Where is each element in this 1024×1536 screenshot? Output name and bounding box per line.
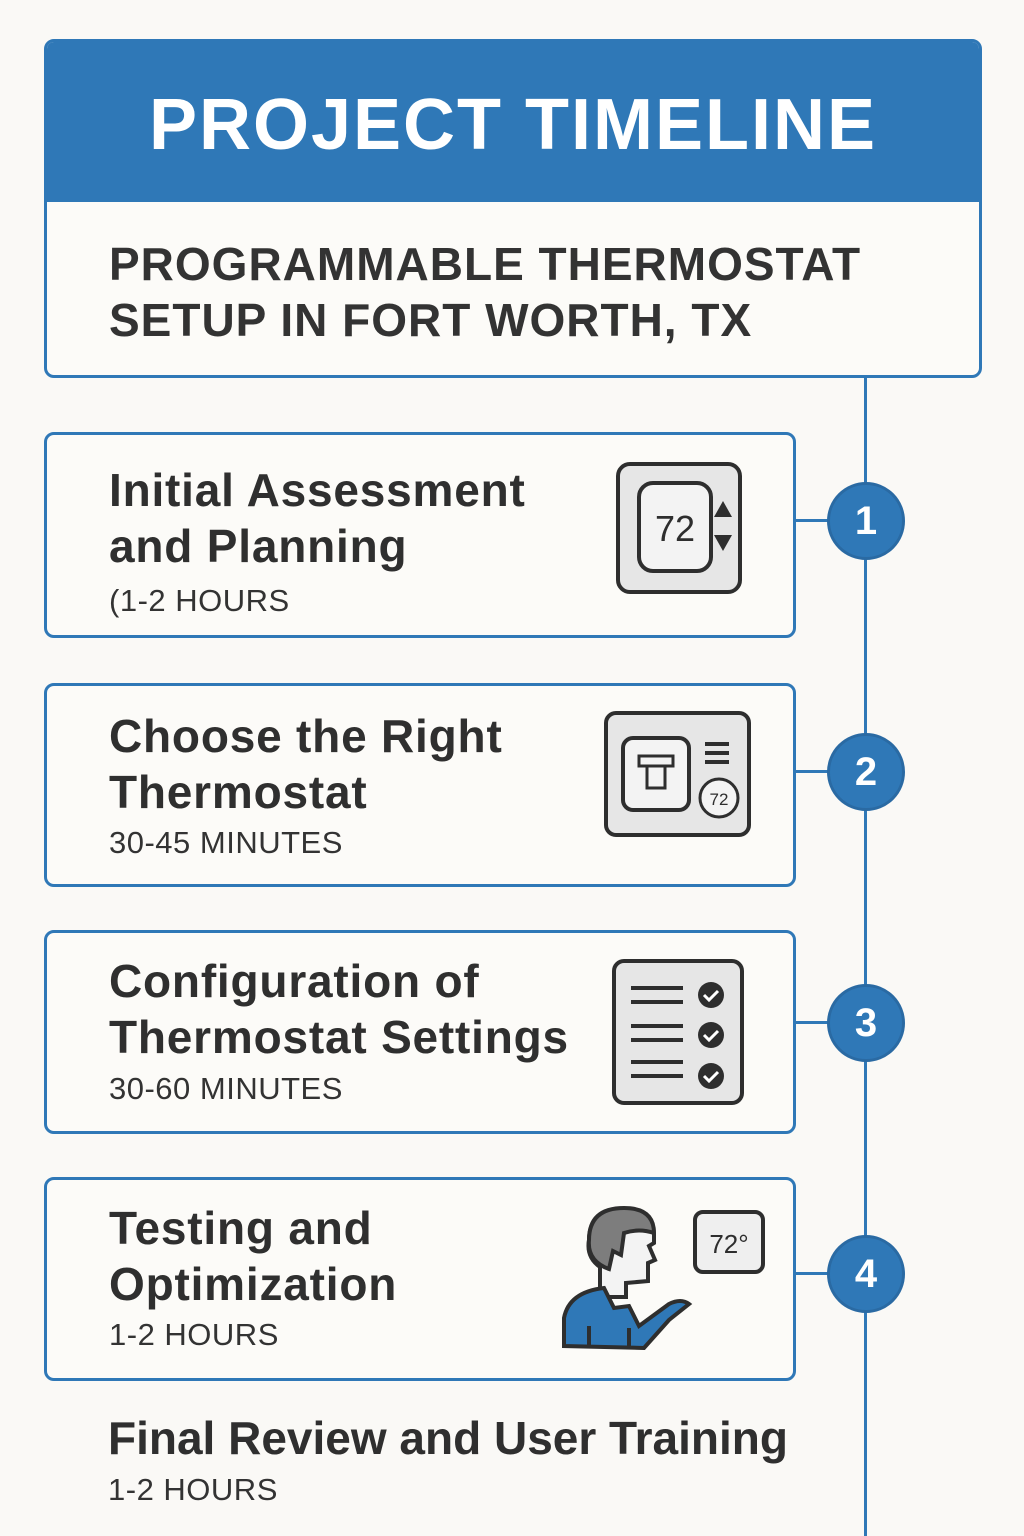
subtitle: SETUP IN FORT WORTH, TX — [109, 294, 752, 346]
step 3 marker: 3 — [855, 1001, 877, 1045]
step 4 marker: 4 — [855, 1252, 877, 1296]
heading 1: and Planning — [109, 520, 407, 572]
subtitle: PROGRAMMABLE THERMOSTAT — [109, 238, 861, 290]
card 2 — [44, 683, 796, 887]
connector 1 — [796, 519, 832, 522]
connector 2 — [796, 770, 832, 773]
subtitle — [109, 238, 861, 346]
heading 3 — [109, 955, 569, 1063]
final step heading: Final Review and User Training — [108, 1412, 788, 1464]
title: PROJECT TIMELINE — [149, 85, 877, 165]
card 4 — [44, 1177, 796, 1381]
icon: person with thermostat: 72° — [709, 1229, 749, 1259]
heading 2: Thermostat — [109, 766, 367, 818]
header panel — [44, 39, 982, 378]
heading 1: Initial Assessment — [109, 464, 526, 516]
step 4 marker — [827, 1235, 905, 1313]
heading 4 — [109, 1202, 397, 1310]
duration 2: 30-45 MINUTES — [109, 825, 343, 860]
icon: person with thermostat — [562, 1206, 765, 1350]
icon: thermostat 72 — [616, 462, 742, 594]
final step duration: 1-2 HOURS — [108, 1472, 278, 1507]
timeline line — [864, 370, 867, 1536]
icon: thermostat device: 72 — [710, 790, 728, 809]
heading 3: Configuration of — [109, 955, 480, 1007]
step 1 marker: 1 — [855, 499, 877, 543]
heading 1 — [109, 464, 526, 572]
icon: thermostat device — [604, 711, 751, 837]
connector 4 — [796, 1272, 832, 1275]
card 3 — [44, 930, 796, 1134]
step 1 marker — [827, 482, 905, 560]
heading 2: Choose the Right — [109, 710, 503, 762]
step 2 marker: 2 — [855, 750, 877, 794]
step 2 marker — [827, 733, 905, 811]
heading 2 — [109, 710, 503, 818]
title — [47, 42, 979, 202]
card 1 — [44, 432, 796, 638]
heading 4: Testing and — [109, 1202, 373, 1254]
duration 4: 1-2 HOURS — [109, 1317, 279, 1352]
icon: checklist — [612, 959, 744, 1105]
duration 3: 30-60 MINUTES — [109, 1071, 343, 1106]
heading 3: Thermostat Settings — [109, 1011, 569, 1063]
icon: thermostat 72: 72 — [655, 508, 695, 549]
heading 4: Optimization — [109, 1258, 397, 1310]
connector 3 — [796, 1021, 832, 1024]
duration 1: (1-2 HOURS — [109, 583, 290, 618]
step 3 marker — [827, 984, 905, 1062]
